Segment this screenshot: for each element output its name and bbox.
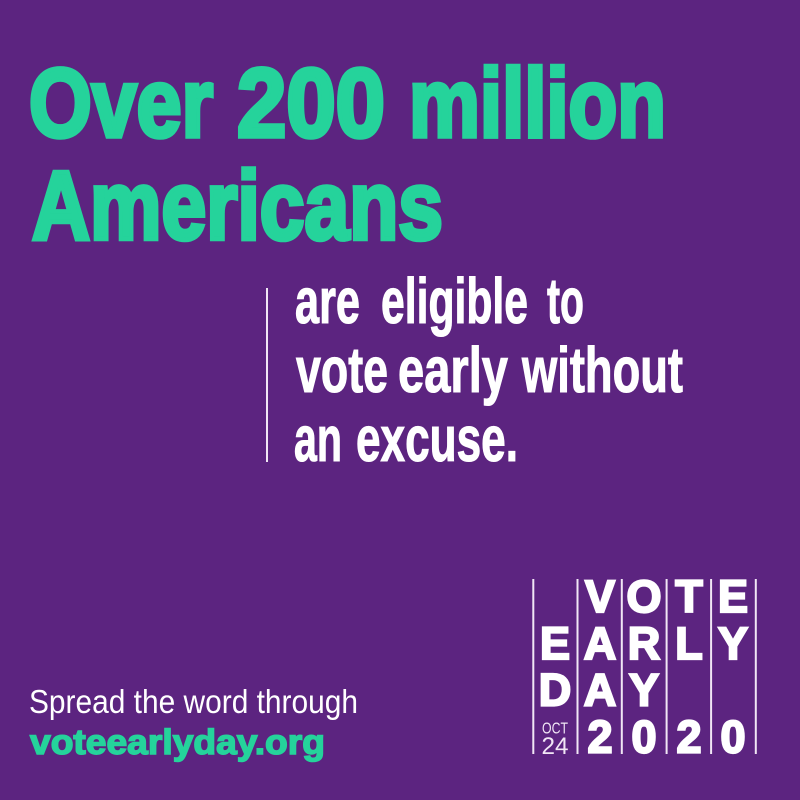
logo letters: R xyxy=(628,618,660,669)
call to action: voteearlyday.org xyxy=(30,723,325,762)
statement text xyxy=(294,265,683,475)
call to action xyxy=(29,683,358,762)
logo letters: E xyxy=(718,571,748,622)
logo letters: E xyxy=(540,618,570,669)
title: million xyxy=(409,48,666,158)
vertical divider line xyxy=(266,288,268,462)
call to action: Spread the word through xyxy=(29,683,358,720)
statement text: early xyxy=(398,334,508,406)
statement text: vote xyxy=(296,334,388,406)
statement text: to xyxy=(547,265,584,337)
logo letters: 2 xyxy=(587,712,613,762)
logo letters: 0 xyxy=(720,712,746,762)
title: Americans xyxy=(32,151,443,260)
statement text: an xyxy=(294,403,342,475)
logo letters: V xyxy=(585,571,615,622)
logo letters: T xyxy=(675,571,703,622)
logo letters: 0 xyxy=(631,712,657,762)
logo letters: O xyxy=(626,571,662,622)
statement text: are xyxy=(295,265,360,337)
logo letters: A xyxy=(584,618,616,669)
logo: Vote Early Day 2020 xyxy=(532,571,757,762)
logo letters: Y xyxy=(718,618,748,669)
logo letters: L xyxy=(675,618,703,669)
logo column lines xyxy=(532,579,757,754)
title: Over xyxy=(29,48,213,158)
logo letters: A xyxy=(584,664,616,716)
logo letters xyxy=(539,571,748,762)
statement text: eligible xyxy=(381,265,528,337)
title xyxy=(29,48,666,260)
logo letters: 2 xyxy=(676,712,702,762)
logo letters: D xyxy=(539,664,571,716)
logo date: 24 xyxy=(542,733,568,760)
logo letters: Y xyxy=(629,664,659,716)
title: 200 xyxy=(237,48,385,158)
statement text: without xyxy=(521,334,683,406)
statement text: excuse. xyxy=(356,403,518,475)
logo date xyxy=(542,720,568,760)
logo date: OCT xyxy=(542,720,568,738)
